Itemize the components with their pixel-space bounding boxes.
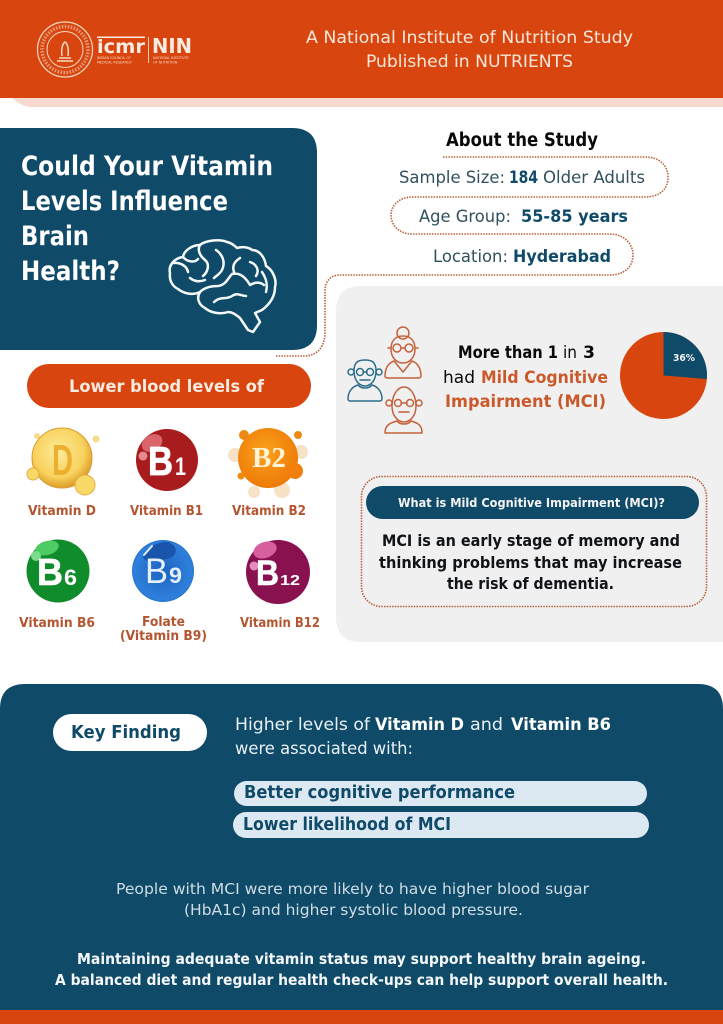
label: vitamin D: Vitamin D xyxy=(28,504,96,519)
icon: grandfather, navy xyxy=(348,360,382,401)
label: vitamin B2: Vitamin B2 xyxy=(232,504,306,519)
label: folate vitamin B9 xyxy=(120,615,207,644)
location xyxy=(433,247,611,267)
heading: Levels Influence xyxy=(21,186,228,217)
sample size xyxy=(399,168,645,188)
icon: vitamin D: D xyxy=(52,436,73,485)
label: vitamin B1: Vitamin B1 xyxy=(130,504,203,519)
heading: Brain xyxy=(21,221,89,252)
icon: vitamin B1: B xyxy=(148,438,173,484)
icon: vitamin B12: B xyxy=(256,554,279,593)
icon: vitamin B1: 1 xyxy=(175,453,186,481)
label: vitamin B6: Vitamin B6 xyxy=(19,616,95,631)
callout body: MCI is an early stage of memory and xyxy=(382,531,680,550)
statement: more than 1 in 3: Impairment (MCI) xyxy=(445,392,606,412)
finding text xyxy=(235,715,611,759)
finding pill: lower likelihood of MCI: Lower likelihood of MCI xyxy=(243,814,451,835)
location: Location: xyxy=(433,247,508,267)
heading: Health? xyxy=(21,256,120,287)
header title: Published in NUTRIENTS xyxy=(366,52,573,72)
icon: vitamin B1 xyxy=(136,429,198,491)
statement: more than 1 in 3: had xyxy=(443,368,475,388)
closing message xyxy=(55,950,668,989)
statement: more than 1 in 3: 3 xyxy=(583,343,595,363)
callout heading pill xyxy=(366,486,699,519)
ICMR small caption xyxy=(97,56,132,64)
key finding pill: Key Finding xyxy=(71,722,181,743)
icon: vitamin B6 xyxy=(26,538,90,602)
icmr wordmark: icmr xyxy=(97,36,146,58)
heading: About the Study xyxy=(446,130,598,151)
icon: vitamin B6: B xyxy=(37,552,63,594)
icon: ICMR round emblem xyxy=(38,22,92,77)
icon: vitamin B12 xyxy=(246,538,310,604)
footer band xyxy=(0,1010,723,1024)
finding text: Vitamin D xyxy=(375,715,464,735)
pie chart: 36 percent: 36% xyxy=(673,353,695,364)
sample size: Older Adults xyxy=(543,168,645,188)
header title: A National Institute of Nutrition Study xyxy=(306,28,633,48)
logo: ICMR emblem and NIN wordmark xyxy=(38,22,192,77)
icon: vitamin B6: 6 xyxy=(64,565,77,590)
icon: folate vitamin B9 xyxy=(132,540,194,602)
icon: vitamin B2 xyxy=(228,428,308,498)
NIN small caption: NATIONAL INSTITUTE xyxy=(153,56,189,60)
statement: more than 1 in 3: in xyxy=(563,343,577,363)
icon: folate vitamin B9: B xyxy=(145,552,168,591)
header title xyxy=(306,28,633,72)
NIN small caption xyxy=(153,56,189,64)
label: folate vitamin B9: Folate xyxy=(142,615,185,630)
divider and NIN wordmark: NIN xyxy=(152,34,192,58)
label: folate vitamin B9: (Vitamin B9) xyxy=(120,629,207,644)
age group xyxy=(419,207,628,227)
heading xyxy=(21,151,273,287)
icon: grandmother xyxy=(385,327,421,378)
dotted connector: about the study xyxy=(275,157,668,356)
age group: 55-85 years xyxy=(521,207,628,227)
pill: lower blood levels: Lower blood levels of xyxy=(69,377,265,397)
finding text: and xyxy=(470,715,503,735)
icon: grandfather, orange xyxy=(385,387,422,433)
closing message: Maintaining adequate vitamin status may support healthy brain ageing. xyxy=(77,950,646,968)
panel: main question xyxy=(0,128,317,350)
callout body: thinking problems that may increase xyxy=(379,553,682,572)
ICMR small caption: MEDICAL RESEARCH xyxy=(97,60,132,64)
callout body: the risk of dementia. xyxy=(447,574,614,593)
ICMR small caption: INDIAN COUNCIL OF xyxy=(97,56,131,60)
sample size: Sample Size: xyxy=(399,168,505,188)
finding text: Higher levels of xyxy=(235,715,371,735)
statement: more than 1 in 3: More than 1 xyxy=(458,343,558,363)
finding text: Vitamin B6 xyxy=(511,715,611,735)
icon: brain xyxy=(170,240,276,332)
heading: Could Your Vitamin xyxy=(21,151,273,182)
statement: more than 1 in 3: Mild Cognitive xyxy=(481,368,608,388)
icon: vitamin B12: 12 xyxy=(280,572,300,589)
location: Hyderabad xyxy=(513,247,611,267)
blood sugar note: People with MCI were more likely to have higher blood sugar xyxy=(116,880,590,898)
callout: what is MCI xyxy=(362,476,706,606)
blood sugar note: (HbA1c) and higher systolic blood pressure. xyxy=(184,901,523,919)
icon: vitamin D xyxy=(27,428,100,495)
age group: Age Group: xyxy=(419,207,511,227)
icon: folate vitamin B9: 9 xyxy=(169,563,182,588)
callout body xyxy=(379,531,682,593)
statement: more than 1 in 3 xyxy=(443,343,608,412)
pie chart: 36 percent xyxy=(620,332,707,419)
finding pill: better cognitive performance xyxy=(234,781,647,806)
pill: lower blood levels xyxy=(27,364,311,408)
panel: MCI prevalence xyxy=(336,286,723,642)
sample size: 184 xyxy=(509,168,538,188)
icon: older adults group xyxy=(348,327,422,433)
finding pill: better cognitive performance: Better cognitive performance xyxy=(244,782,515,803)
callout heading pill: What is Mild Cognitive Impairment (MCI)? xyxy=(398,496,665,510)
closing message: A balanced diet and regular health check-ups can help support overall health. xyxy=(55,971,668,989)
NIN small caption: OF NUTRITION xyxy=(153,60,178,64)
finding text: were associated with: xyxy=(235,739,413,759)
blood sugar note xyxy=(116,880,590,919)
label: vitamin B12: Vitamin B12 xyxy=(240,616,320,631)
header band xyxy=(0,0,723,107)
key finding pill xyxy=(53,714,207,751)
icon: vitamin B2: B2 xyxy=(252,443,286,474)
panel: key finding xyxy=(0,684,723,1024)
finding pill: lower likelihood of MCI xyxy=(233,812,649,838)
about the study xyxy=(399,130,645,267)
